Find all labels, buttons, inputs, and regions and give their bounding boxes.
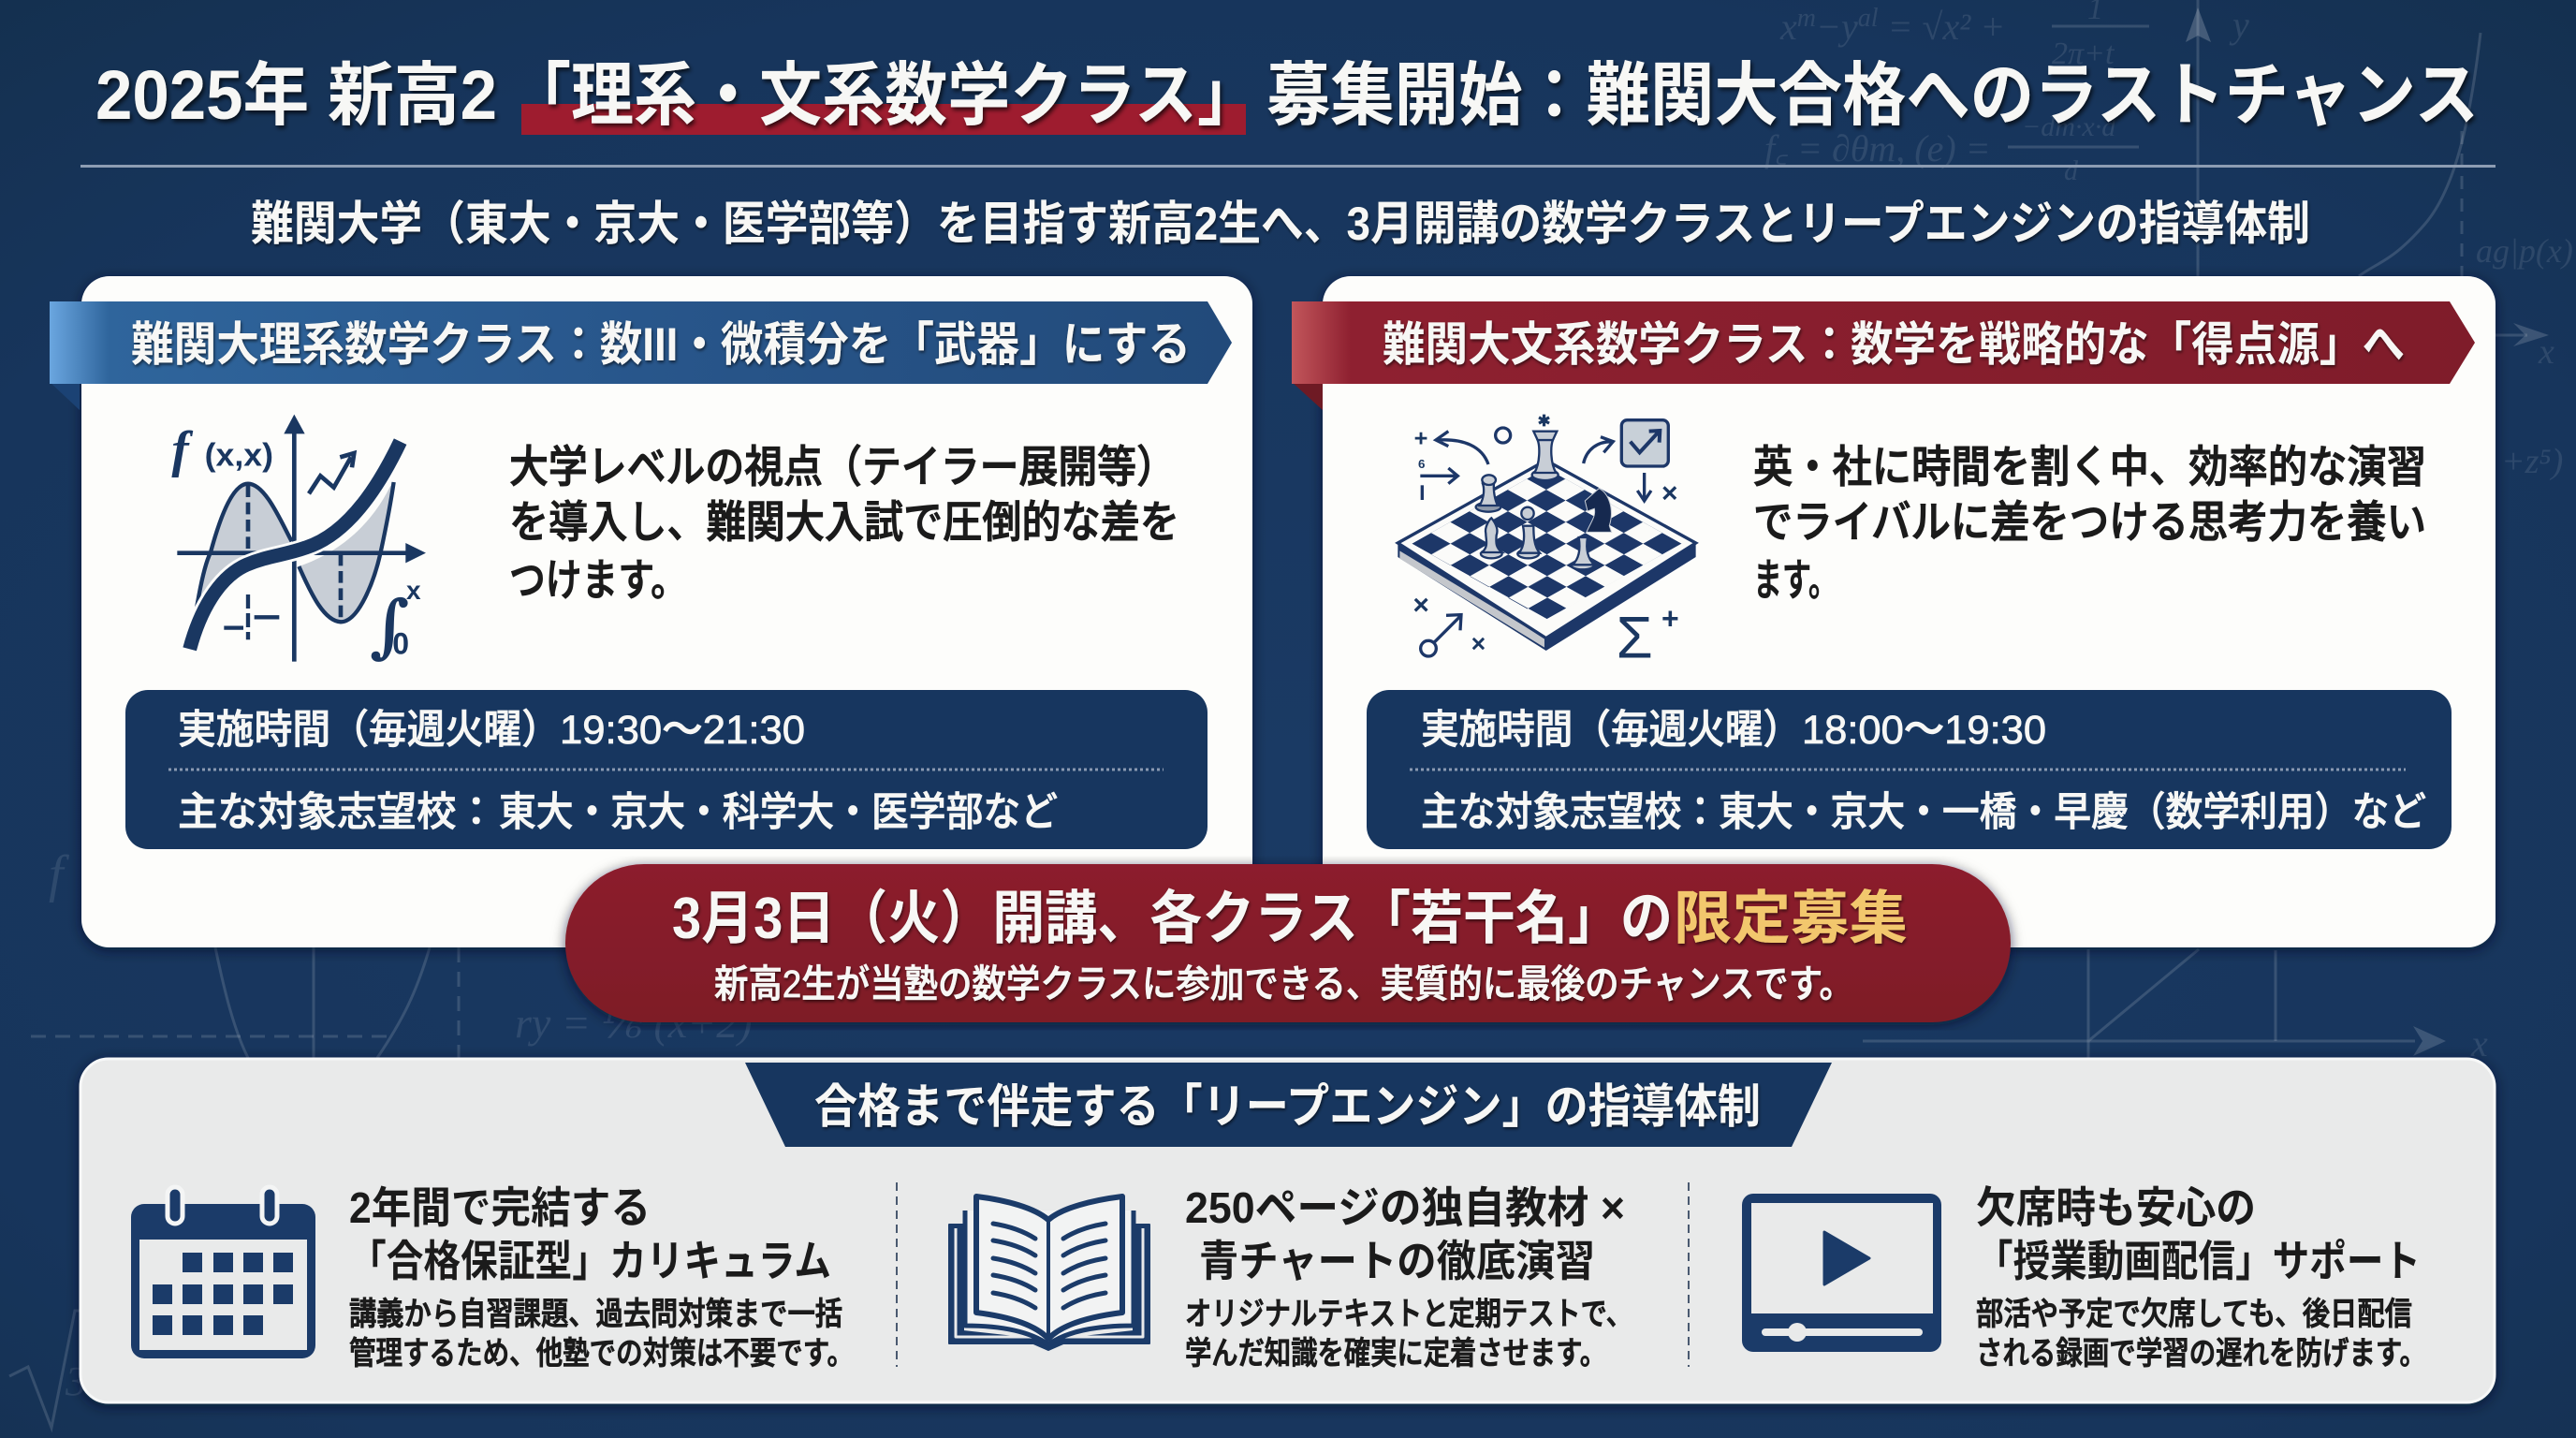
description text: つけます。	[509, 555, 687, 605]
background math decoration: f꜀ = ∂θm, (e) =	[1764, 127, 1991, 169]
info box: schedule and target schools: 18:00〜19:30	[1802, 708, 2046, 753]
background math decoration: d	[2064, 155, 2079, 186]
description text: でライバルに差をつける思考力を養い	[1753, 497, 2426, 547]
info box: schedule and target schools	[1367, 690, 2452, 849]
background math decoration: x	[2470, 1022, 2488, 1064]
icon: function graph: (x,x)	[205, 437, 273, 473]
icon: chessboard strategy	[1398, 412, 1696, 671]
feature text: 部活や予定で欠席しても、後日配信	[1976, 1297, 2412, 1332]
background math decoration: 2π+t	[2052, 37, 2115, 71]
info box: schedule and target schools: 東大・京大・科学大・医学部など	[499, 790, 1058, 835]
feature text: 欠席時も安心の	[1976, 1183, 2256, 1232]
feature text: 講義から自習課題、過去問対策まで一括	[349, 1297, 842, 1332]
description text: を導入し、難関大入試で圧倒的な差を	[509, 497, 1179, 547]
info box: schedule and target schools: 主な対象志望校：	[178, 790, 496, 835]
background math decoration: ag|p(x)	[2476, 232, 2573, 270]
feature: curriculum	[131, 1183, 854, 1372]
callout: limited enrollment: 限定募集	[1674, 887, 1908, 951]
background math decoration: −y	[1816, 6, 1858, 48]
header divider	[80, 165, 2496, 168]
background math decoration: x	[2538, 332, 2554, 372]
feature text	[1976, 1183, 2426, 1372]
callout: limited enrollment	[565, 864, 2011, 1022]
feature text: 学んだ知識を確実に定着させます。	[1185, 1336, 1606, 1372]
icon: chessboard strategy: +	[1661, 602, 1679, 636]
feature text: オリジナルテキストと定期テストで、	[1185, 1297, 1632, 1332]
title: 2025年 新高2	[95, 56, 497, 134]
ribbon heading	[50, 301, 1232, 384]
background math decoration: ry = ⅙ (x+2)	[515, 999, 753, 1047]
icon: chessboard strategy: 6	[1418, 457, 1425, 471]
card background	[81, 276, 1252, 947]
icon: chessboard strategy: ×	[1661, 478, 1677, 509]
feature text: 2年間で完結する	[349, 1183, 651, 1232]
title: 「理系・文系数学クラス」	[508, 56, 1260, 134]
section heading	[745, 1063, 1832, 1147]
background math decoration: = √x² +	[1879, 6, 2005, 48]
icon: function graph: f	[171, 420, 193, 477]
feature text: される録画で学習の遅れを防げます。	[1976, 1336, 2426, 1372]
icon: chessboard strategy: ×	[1412, 590, 1429, 621]
info box: schedule and target schools	[125, 690, 1208, 849]
feature text: 250ページの独自教材 ×	[1185, 1183, 1625, 1232]
background math decoration: y	[2229, 4, 2249, 46]
panel: humanities math class	[1292, 276, 2496, 947]
description text: 英・社に時間を割く中、効率的な演習	[1753, 442, 2426, 492]
icon: video player	[1742, 1194, 1941, 1352]
background math decoration: −dm·x·d	[2022, 111, 2116, 142]
feature: video support	[1742, 1183, 2426, 1372]
feature text: 「合格保証型」カリキュラム	[349, 1237, 831, 1285]
description text	[1753, 442, 2426, 605]
ribbon fold	[50, 382, 80, 410]
description text	[509, 442, 1179, 605]
info box: schedule and target schools: 実施時間（毎週火曜）	[1421, 708, 1801, 753]
icon: function graph: 0	[392, 626, 409, 660]
icon: function graph: ∫	[370, 585, 409, 666]
feature text: 「授業動画配信」サポート	[1976, 1237, 2421, 1285]
background math decoration: al	[1858, 4, 1879, 33]
icon: chessboard strategy: ×	[1471, 630, 1486, 658]
background math decoration: x	[1780, 6, 1797, 48]
title	[95, 56, 2479, 134]
icon: chessboard strategy: Σ	[1617, 606, 1653, 671]
feature text: 管理するため、他塾での対策は不要です。	[349, 1336, 854, 1372]
title: 募集開始：難関大合格へのラストチャンス	[1266, 56, 2479, 134]
feature text	[1185, 1183, 1632, 1372]
callout: limited enrollment: 新高2生が当塾の数学クラスに参加できる、実質的に最後のチャンスです。	[714, 962, 1853, 1005]
feature text: 青チャートの徹底演習	[1199, 1237, 1595, 1285]
background math decoration: f	[49, 845, 70, 903]
ribbon heading	[1292, 301, 2475, 384]
card background	[1323, 276, 2496, 947]
section heading: 合格まで伴走する「リープエンジン」の指導体制	[814, 1080, 1761, 1133]
ribbon heading: 難関大文系数学クラス：数学を戦略的な「得点源」へ	[1383, 318, 2405, 371]
icon: open book	[949, 1196, 1149, 1350]
title highlight bar	[521, 104, 1246, 135]
icon: function graph: x	[406, 576, 421, 605]
panel: support system	[80, 1059, 2495, 1402]
subtitle: 難関大学（東大・京大・医学部等）を目指す新高2生へ、3月開講の数学クラスとリープエンジンの指導体制	[251, 198, 2310, 250]
panel: science math class	[50, 276, 1252, 947]
background math decoration: +z⁵)	[2501, 442, 2563, 481]
icon: chessboard strategy: ✱	[1538, 412, 1551, 430]
description text: ます。	[1753, 555, 1837, 605]
description text: 大学レベルの視点（テイラー展開等）	[509, 442, 1176, 492]
info box: schedule and target schools: 実施時間（毎週火曜）	[178, 708, 560, 753]
icon: function graph	[171, 415, 426, 666]
callout: limited enrollment: 3月3日（火）開講、各クラス「若干名」の	[672, 887, 1673, 951]
panel background	[80, 1059, 2495, 1402]
icon: chessboard strategy: +	[1414, 426, 1427, 452]
ribbon fold	[1292, 382, 1323, 410]
icon: calendar	[131, 1187, 315, 1358]
info box: schedule and target schools: 主な対象志望校：東大・京大・一橋・早慶（数学利用）など	[1421, 790, 2426, 835]
background math decoration: m	[1797, 4, 1816, 33]
info box: schedule and target schools: 19:30〜21:30	[560, 708, 805, 753]
feature text	[349, 1183, 854, 1372]
feature: textbook	[949, 1183, 1632, 1372]
background math decoration: 3	[65, 1358, 86, 1404]
ribbon heading: 難関大理系数学クラス：数III・微積分を「武器」にする	[131, 318, 1191, 371]
